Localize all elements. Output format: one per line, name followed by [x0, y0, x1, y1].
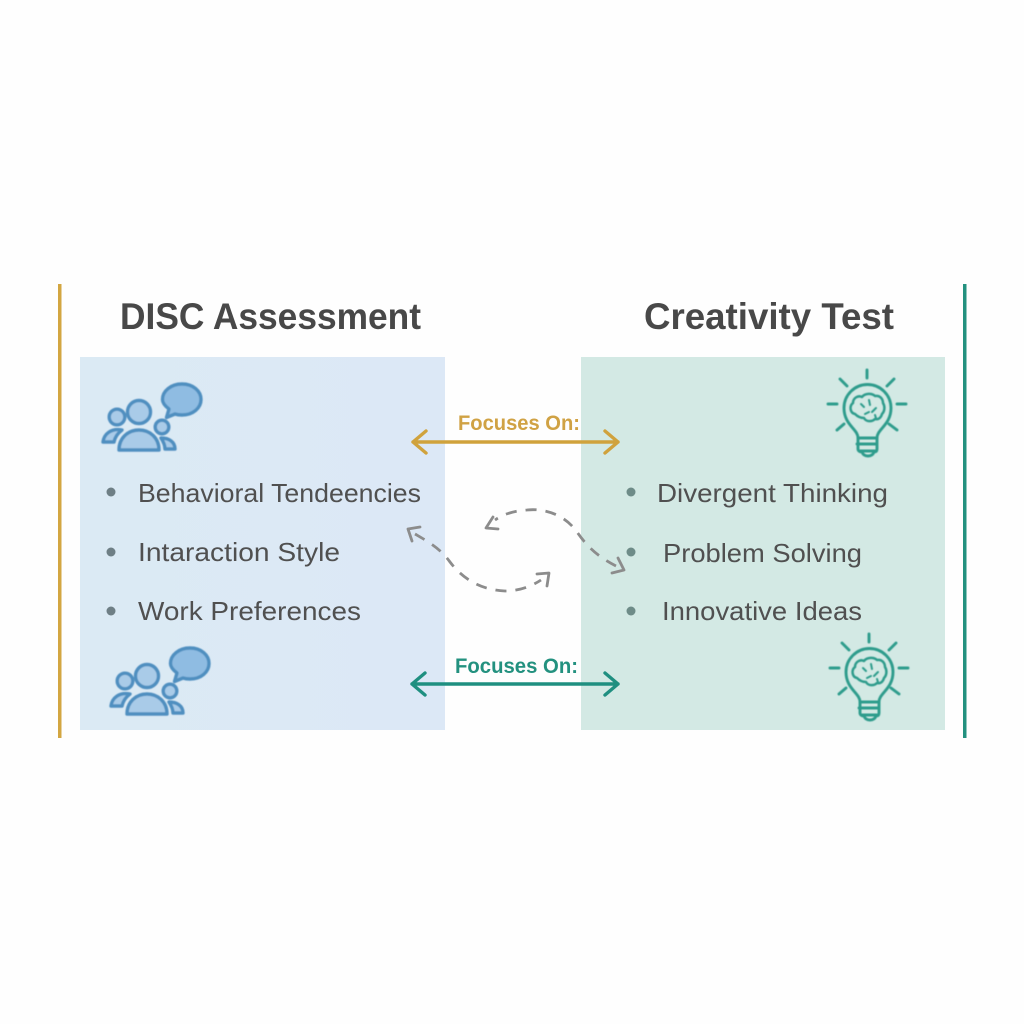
- icon: light bulb with brain, top: [828, 370, 906, 456]
- arrow: gold double-headed: [413, 431, 618, 453]
- list: Creativity Test items: Innovative Ideas: [662, 596, 862, 626]
- arrow: dashed curve left to right: [408, 527, 549, 591]
- list: DISC Assessment items: Behavioral Tendeencies: [138, 478, 421, 508]
- list: Creativity Test items: Divergent Thinking: [657, 478, 888, 508]
- right accent line: [963, 284, 966, 738]
- label: Focuses On (gold): Focuses On:: [458, 412, 580, 435]
- list: DISC Assessment items: Work Preferences: [138, 596, 361, 626]
- arrow: dashed curve right to left: [486, 510, 624, 573]
- heading: Creativity Test: Creativity Test: [644, 296, 894, 337]
- panel: DISC Assessment: [80, 357, 445, 730]
- label: Focuses On (teal): Focuses On:: [455, 655, 578, 678]
- arrow: teal double-headed: [412, 673, 618, 695]
- panel: Creativity Test: [581, 357, 945, 730]
- list: Creativity Test items: Problem Solving: [663, 538, 862, 568]
- left accent line: [58, 284, 62, 738]
- heading: DISC Assessment: DISC Assessment: [120, 296, 421, 337]
- list: Creativity Test items: [626, 478, 888, 626]
- list: DISC Assessment items: Intaraction Style: [138, 537, 340, 567]
- icon: people with speech bubble, top: [103, 384, 201, 450]
- list: DISC Assessment items: [106, 478, 421, 626]
- icon: light bulb with brain, bottom: [830, 634, 908, 720]
- icon: people with speech bubble, bottom: [111, 648, 209, 714]
